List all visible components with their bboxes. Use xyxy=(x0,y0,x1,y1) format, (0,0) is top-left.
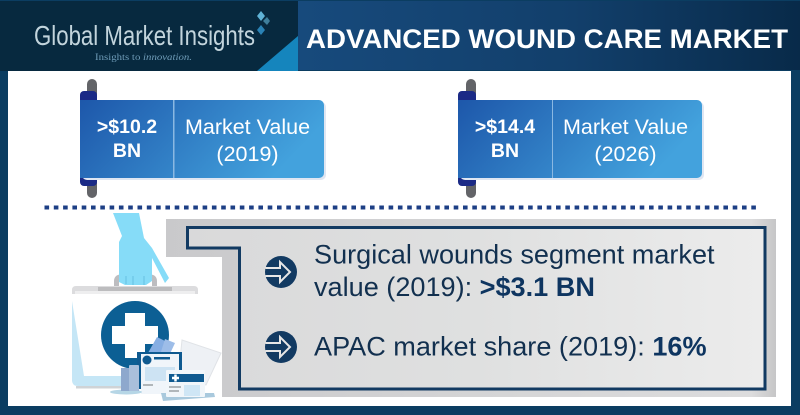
case handle xyxy=(116,277,154,290)
medical cross badge xyxy=(101,301,169,369)
logo wordmark: Global Market Insights xyxy=(34,20,255,51)
icon: arrow xyxy=(265,256,297,288)
value: >$10.2 xyxy=(97,116,157,138)
value: >$14.4 xyxy=(475,116,535,138)
case body xyxy=(72,301,125,386)
gauze sheet xyxy=(178,340,221,385)
stat: APAC share xyxy=(265,330,707,363)
banner: 2019 market value: BN xyxy=(113,140,141,162)
banner: 2019 market value xyxy=(80,79,326,198)
banner: 2019 market value: (2019) xyxy=(216,142,279,166)
roll of tape xyxy=(110,365,142,394)
banner: 2026 market value xyxy=(458,79,704,198)
hand xyxy=(113,213,169,285)
stat text: APAC market share (2019): 16% xyxy=(314,330,707,362)
logo tagline: Insights to innovation. xyxy=(95,53,192,63)
stat: surgical wounds: value (2019): >$3.1 BN xyxy=(314,271,595,302)
banner: 2026 market value: BN xyxy=(491,140,519,162)
label: Market Value xyxy=(185,115,310,139)
logo diamonds xyxy=(257,11,270,35)
dressing packet xyxy=(137,352,182,394)
illustration: first-aid kit and gloved hand xyxy=(72,213,221,401)
label: Market Value xyxy=(563,115,688,139)
stat text: Surgical wounds segment market xyxy=(314,238,715,270)
bandage box xyxy=(161,370,215,401)
banner: 2026 market value: (2026) xyxy=(594,142,657,166)
title: ADVANCED WOUND CARE MARKET xyxy=(306,24,789,54)
panel: key statistics xyxy=(166,219,776,397)
blue swabs xyxy=(148,337,167,356)
case lid xyxy=(72,286,198,294)
header: logo block xyxy=(0,1,298,71)
header: title bar xyxy=(298,1,800,70)
icon: arrow xyxy=(265,331,297,363)
stat: surgical wounds xyxy=(265,238,715,302)
